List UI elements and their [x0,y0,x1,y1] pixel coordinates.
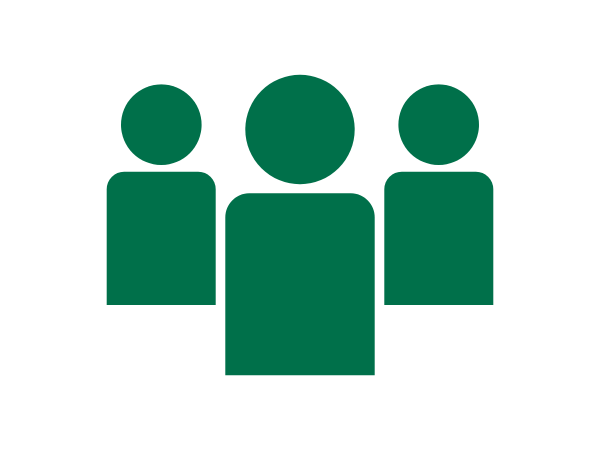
icon: right person [384,84,493,305]
icon: center person [225,75,375,375]
icon: left person [107,84,216,305]
